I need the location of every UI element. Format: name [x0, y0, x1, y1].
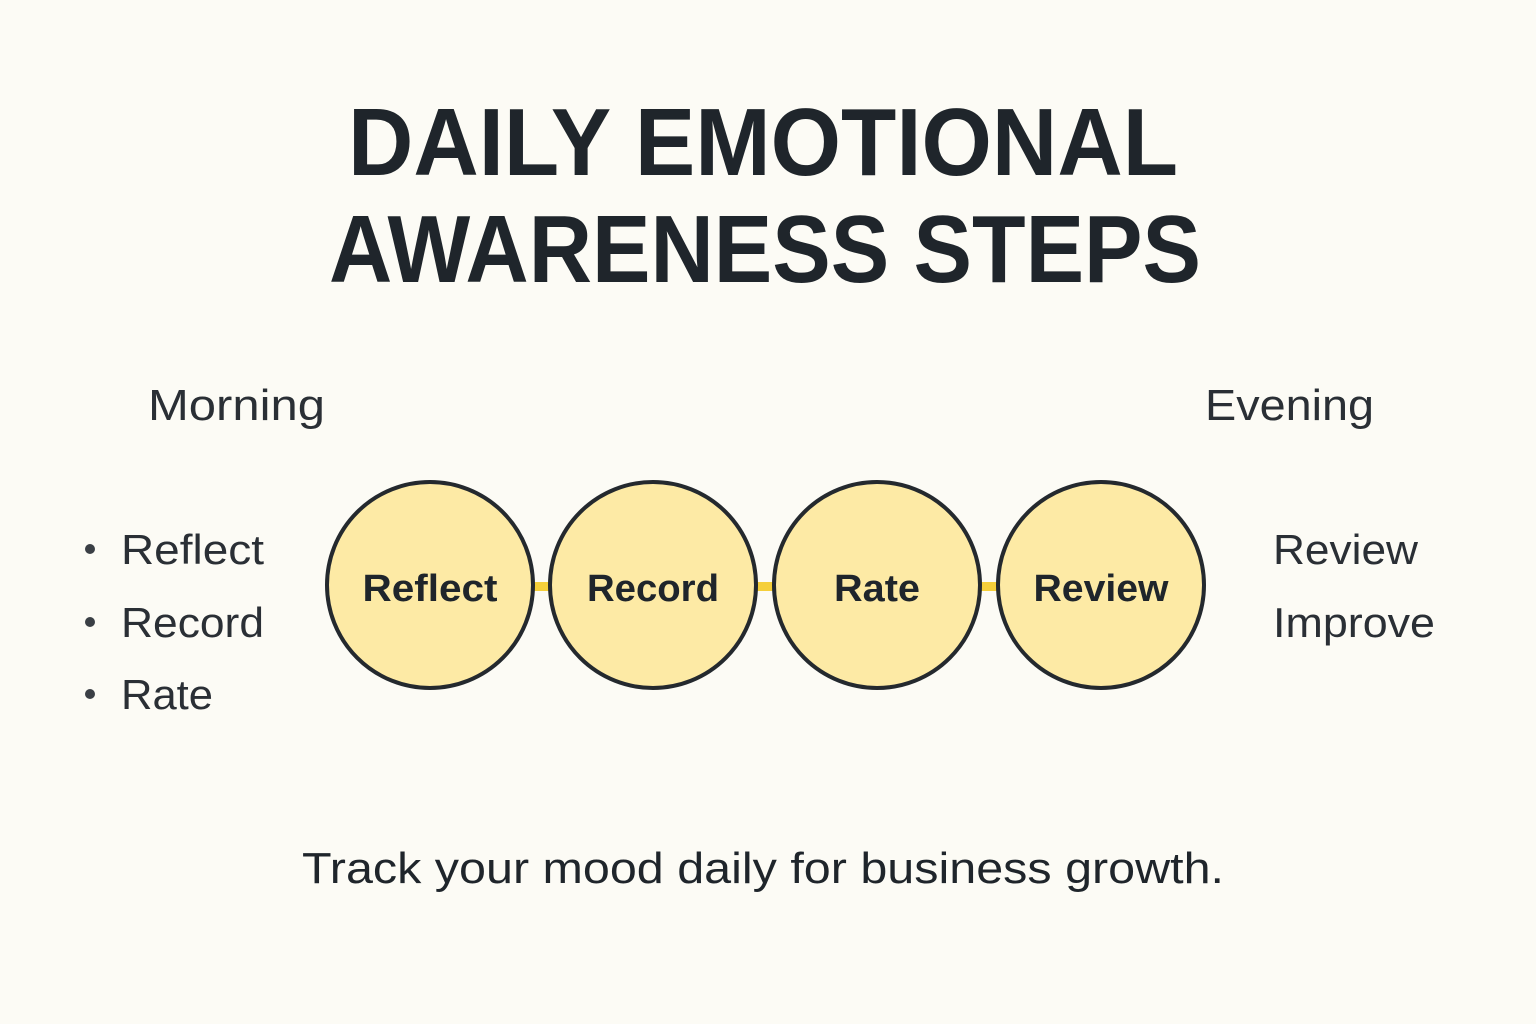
title: AWARENESS STEPS [329, 196, 1201, 303]
step labels: Record [587, 568, 719, 610]
step labels [362, 568, 1169, 610]
title [329, 89, 1201, 303]
step labels: Review [1034, 568, 1169, 610]
step circles [327, 482, 1204, 688]
title: DAILY EMOTIONAL [348, 89, 1178, 196]
evening list: Improve [1273, 599, 1435, 646]
morning list: Record [121, 599, 264, 646]
morning list: Reflect [121, 526, 264, 573]
morning list [85, 526, 264, 718]
footer tagline: Track your mood daily for business growth. [302, 844, 1224, 893]
step labels: Rate [834, 568, 920, 610]
evening list: Review [1273, 526, 1419, 573]
label: Evening: Evening [1205, 381, 1374, 430]
evening list [1273, 526, 1435, 646]
step labels: Reflect [362, 568, 498, 610]
connectors [528, 582, 1010, 591]
label: Morning: Morning [148, 381, 325, 430]
morning list: Rate [121, 671, 213, 718]
